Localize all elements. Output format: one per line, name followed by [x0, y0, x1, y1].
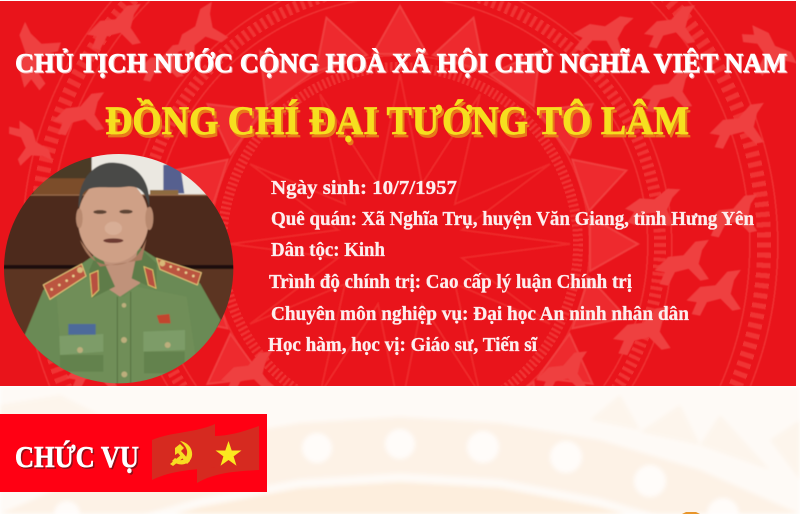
panel: red header with drum rings: [0, 1, 796, 386]
title: president line: CHỦ TỊCH NƯỚC CỘNG HOÀ XÃ HỘI CHỦ NGHĨA VIỆT NAM: [15, 48, 787, 78]
bio: academic title: Học hàm, học vị: Giáo sư, Tiến sĩ: [268, 334, 538, 356]
heading: name: ĐỒNG CHÍ ĐẠI TƯỚNG TÔ LÂM: [105, 97, 689, 143]
epaulettes: [43, 264, 86, 299]
bio: ethnicity: Dân tộc: Kinh: [271, 239, 385, 261]
pockets and buttons: [59, 334, 103, 355]
head: [78, 177, 149, 263]
uniform: [24, 248, 221, 368]
icon: small orange emblem at bottom edge: [682, 512, 700, 514]
icon: hammer and sickle: [170, 441, 192, 466]
panel: pale drum pattern background: [0, 387, 800, 514]
collar tabs: [90, 271, 99, 297]
heading: name: ĐỒNG CHÍ ĐẠI TƯỚNG TÔ LÂM: [107, 100, 691, 146]
bio: birth date: Ngày sinh: 10/7/1957: [271, 177, 457, 199]
icon: star: [216, 441, 242, 466]
section banner: positions: [0, 414, 267, 492]
bio: political level: Trình độ chính trị: Cao cấp lý luận Chính trị: [269, 271, 632, 293]
portrait photo: [0, 150, 237, 387]
icon: flags: [152, 424, 259, 483]
heading: positions label: CHỨC VỤ: [16, 440, 140, 476]
bio: professional: Chuyên môn nghiệp vụ: Đại học An ninh nhân dân: [271, 303, 689, 325]
heading: positions label: CHỨC VỤ: [15, 439, 139, 474]
bio: hometown: Quê quán: Xã Nghĩa Trụ, huyện Văn Giang, tỉnh Hưng Yên: [271, 208, 754, 230]
drum pattern motifs: [8, 2, 796, 386]
title: president line: CHỦ TỊCH NƯỚC CỘNG HOÀ XÃ HỘI CHỦ NGHĨA VIỆT NAM: [16, 49, 788, 79]
